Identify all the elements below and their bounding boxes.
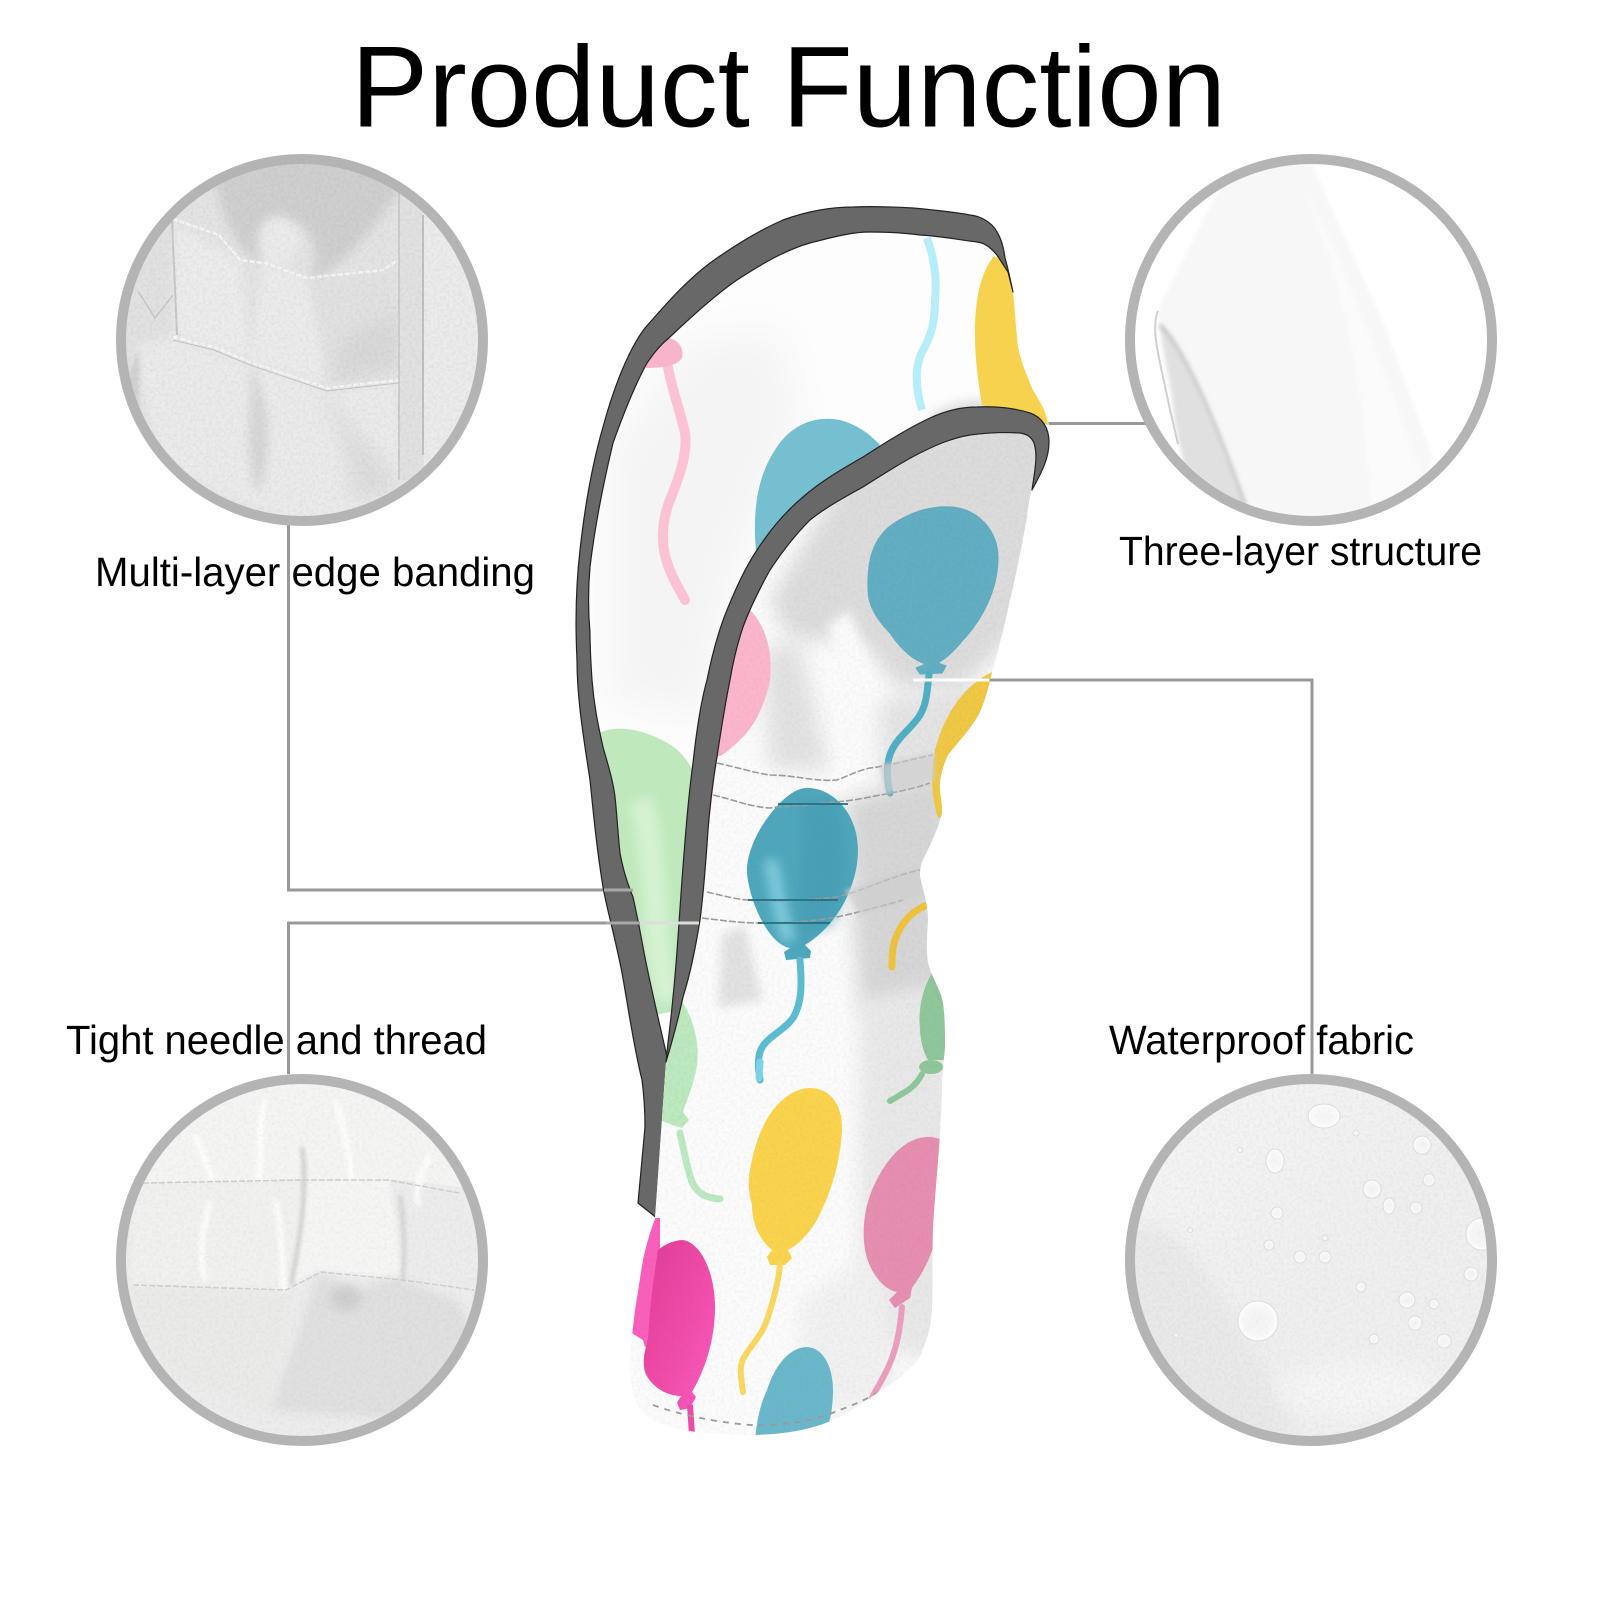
balloon: magenta left sliver bbox=[630, 1218, 660, 1347]
back flap edge band bbox=[576, 207, 1013, 1219]
balloon string: green right bbox=[890, 1074, 922, 1101]
front flap edge band bbox=[666, 407, 1049, 1062]
balloon string: big pink bbox=[872, 1307, 902, 1398]
balloon string: front teal bbox=[887, 674, 929, 793]
balloon string: small yellow bbox=[892, 905, 927, 967]
balloon: front teal bbox=[868, 507, 998, 674]
label: tight needle and thread: Tight needle and thread bbox=[66, 1017, 487, 1063]
connector lines bbox=[288, 424, 1312, 1074]
gather folds bbox=[845, 752, 935, 915]
balloon string: light blue end bbox=[759, 1062, 760, 1078]
balloon: back green bbox=[600, 728, 692, 1014]
circle: waterproof fabric detail bbox=[1125, 1074, 1498, 1446]
balloon: big pink bbox=[864, 1137, 945, 1308]
balloon: front yellow right bbox=[932, 672, 992, 818]
balloon string: lower green bbox=[680, 1133, 720, 1199]
balloon: magenta bbox=[644, 1240, 715, 1410]
label: multi-layer edge banding: Multi-layer edge banding bbox=[95, 549, 535, 595]
hem stitching bbox=[653, 1393, 877, 1425]
balloon string: big center teal bbox=[758, 960, 801, 1080]
balloon string: magenta bbox=[690, 1405, 692, 1435]
label: three-layer structure: Three-layer structure bbox=[1119, 528, 1482, 574]
title: Product Function bbox=[351, 24, 1226, 152]
front body panel bbox=[630, 433, 1036, 1435]
water droplets bbox=[1174, 1104, 1498, 1348]
balloon: back blue bbox=[754, 418, 880, 550]
balloon seam dark stitches bbox=[748, 804, 848, 923]
balloon: green right bbox=[920, 974, 945, 1060]
label: waterproof fabric: Waterproof fabric bbox=[1109, 1017, 1414, 1063]
circle: multi-layer edge banding detail bbox=[116, 150, 488, 526]
balloon string: back pink bbox=[663, 367, 686, 600]
balloon knot: back pink bbox=[646, 338, 682, 368]
balloon string: back yellow bbox=[805, 525, 813, 550]
leather grain texture bbox=[632, 534, 992, 1434]
balloon string: big yellow bbox=[741, 1265, 780, 1392]
connector overlays on product bbox=[604, 680, 989, 923]
balloon: back yellow bbox=[975, 257, 1048, 425]
back flap panel bbox=[600, 236, 1049, 1014]
gather stitching bbox=[702, 755, 933, 923]
circle: tight needle and thread detail bbox=[116, 1074, 488, 1446]
balloon: front pink upper bbox=[709, 610, 771, 822]
balloon: big center teal bbox=[747, 788, 858, 960]
balloon: big yellow bbox=[749, 1088, 842, 1265]
product: golf club head cover bbox=[570, 200, 1070, 1450]
balloon string: back light blue bbox=[917, 238, 936, 410]
balloon knot: green right bbox=[919, 1060, 943, 1074]
circle: three-layer structure detail bbox=[1125, 154, 1497, 526]
balloon: front lower green bbox=[660, 998, 698, 1128]
balloon: back magenta corner bbox=[1020, 432, 1040, 470]
balloon: bottom teal bbox=[755, 1347, 833, 1440]
infographic: product function bbox=[66, 43, 1497, 1446]
